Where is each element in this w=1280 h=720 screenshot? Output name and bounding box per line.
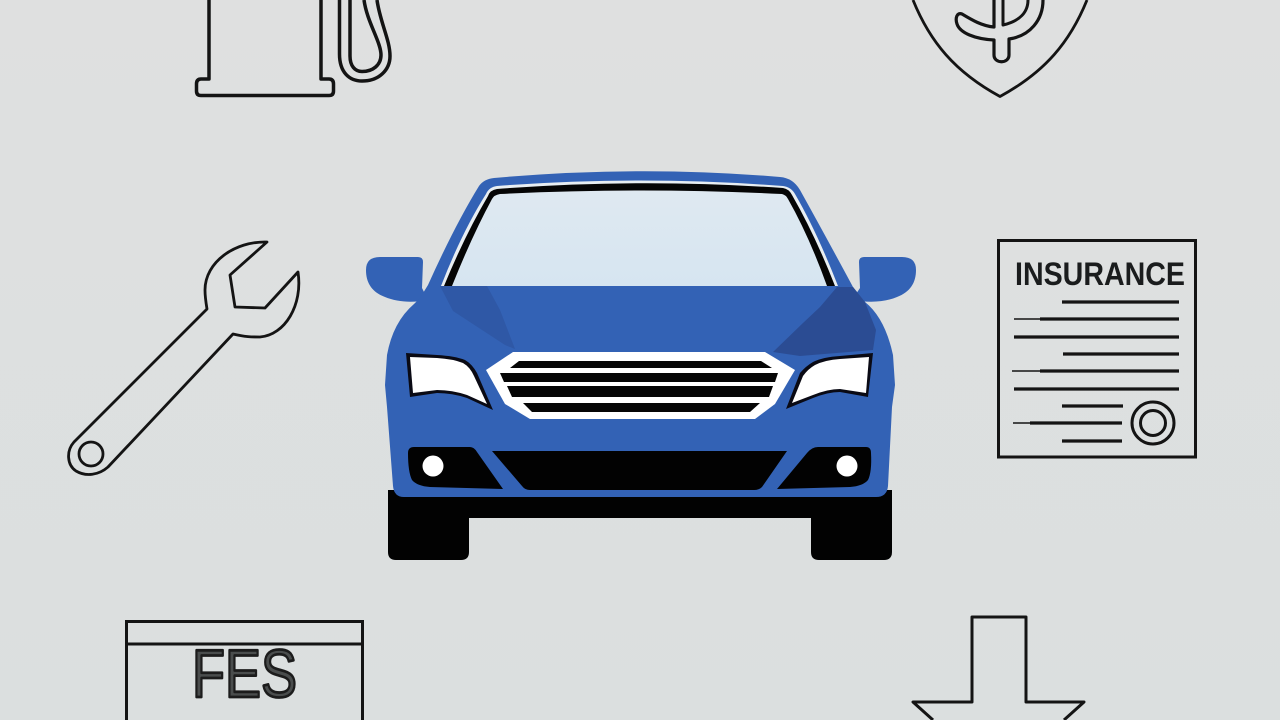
left fog lamp housing bbox=[408, 447, 503, 489]
document text lines bbox=[1012, 302, 1179, 441]
icon: shield with dollar sign bbox=[913, 0, 1087, 96]
wheels and lower bumper bbox=[388, 490, 892, 560]
icon: down arrow bbox=[913, 617, 1084, 720]
right mirror bbox=[852, 257, 916, 302]
document seal bbox=[1132, 402, 1174, 444]
left headlight bbox=[406, 353, 493, 410]
right fog lamp housing bbox=[777, 447, 871, 489]
FES label: FES bbox=[192, 636, 297, 712]
left mirror bbox=[366, 257, 428, 302]
icon: fuel pump bbox=[196, 0, 390, 96]
right headlight bbox=[786, 353, 873, 409]
icon: FES calendar panel bbox=[126, 622, 362, 720]
car, front view bbox=[366, 171, 916, 560]
left hood shading bbox=[440, 286, 515, 349]
icon: wrench bbox=[69, 242, 299, 474]
windshield trim bbox=[441, 180, 838, 286]
windshield glass bbox=[452, 190, 827, 286]
right hood shading bbox=[773, 287, 876, 356]
car body bbox=[385, 171, 895, 497]
lower air intake bbox=[492, 451, 787, 490]
fog lamps bbox=[422, 456, 858, 476]
front grille bbox=[486, 352, 795, 419]
icon: insurance document bbox=[998, 240, 1196, 457]
document heading: INSURANCE bbox=[1015, 256, 1185, 292]
windshield frame bbox=[444, 183, 835, 286]
